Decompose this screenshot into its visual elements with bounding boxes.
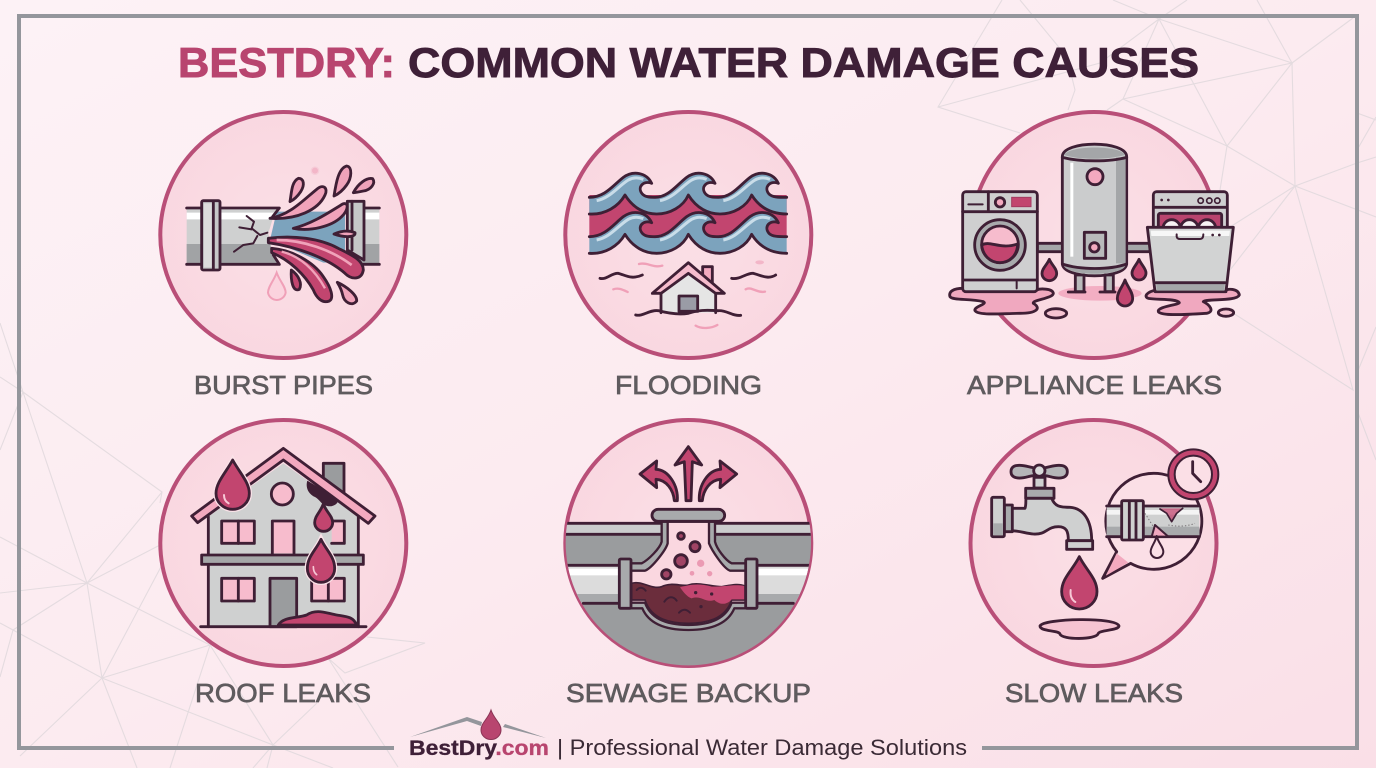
logo drop	[481, 710, 501, 740]
icon: sewage pipe	[565, 447, 812, 670]
badge circle	[565, 112, 811, 358]
label: SLOW LEAKS	[1005, 678, 1183, 708]
label: APPLIANCE LEAKS	[967, 370, 1222, 400]
panel: roof leaks	[160, 420, 406, 708]
label: SEWAGE BACKUP	[566, 678, 811, 708]
icon: waves and house	[589, 173, 787, 328]
logo roof	[410, 717, 546, 738]
icon: appliances leaking	[950, 144, 1239, 318]
badge circle	[970, 420, 1216, 666]
label: FLOODING	[615, 370, 762, 400]
tagline: | Professional Water Damage Solutions	[557, 735, 967, 760]
title: COMMON WATER DAMAGE CAUSES	[408, 39, 1199, 86]
panel: slow leaks	[970, 420, 1218, 708]
drops	[1042, 259, 1057, 281]
panel: burst pipes	[160, 112, 406, 400]
panel: flooding	[565, 112, 811, 400]
label: ROOF LEAKS	[195, 678, 371, 708]
panel: sewage backup	[565, 420, 812, 708]
logo text: BestDry .com	[409, 737, 549, 760]
label: BURST PIPES	[194, 370, 373, 400]
panel: appliance leaks	[950, 112, 1239, 400]
footer	[409, 710, 967, 760]
badge circle	[565, 420, 811, 666]
dishwasher	[1153, 192, 1227, 232]
icon: burst pipe	[187, 166, 379, 304]
badge circle	[971, 112, 1217, 358]
icon: leaking house	[192, 448, 375, 627]
badge circle	[160, 420, 406, 666]
title: BESTDRY:	[178, 39, 395, 86]
washer	[963, 192, 1037, 292]
water heater	[1062, 144, 1127, 276]
badge circle	[160, 112, 406, 358]
icon: dripping faucet with clock	[992, 449, 1218, 638]
